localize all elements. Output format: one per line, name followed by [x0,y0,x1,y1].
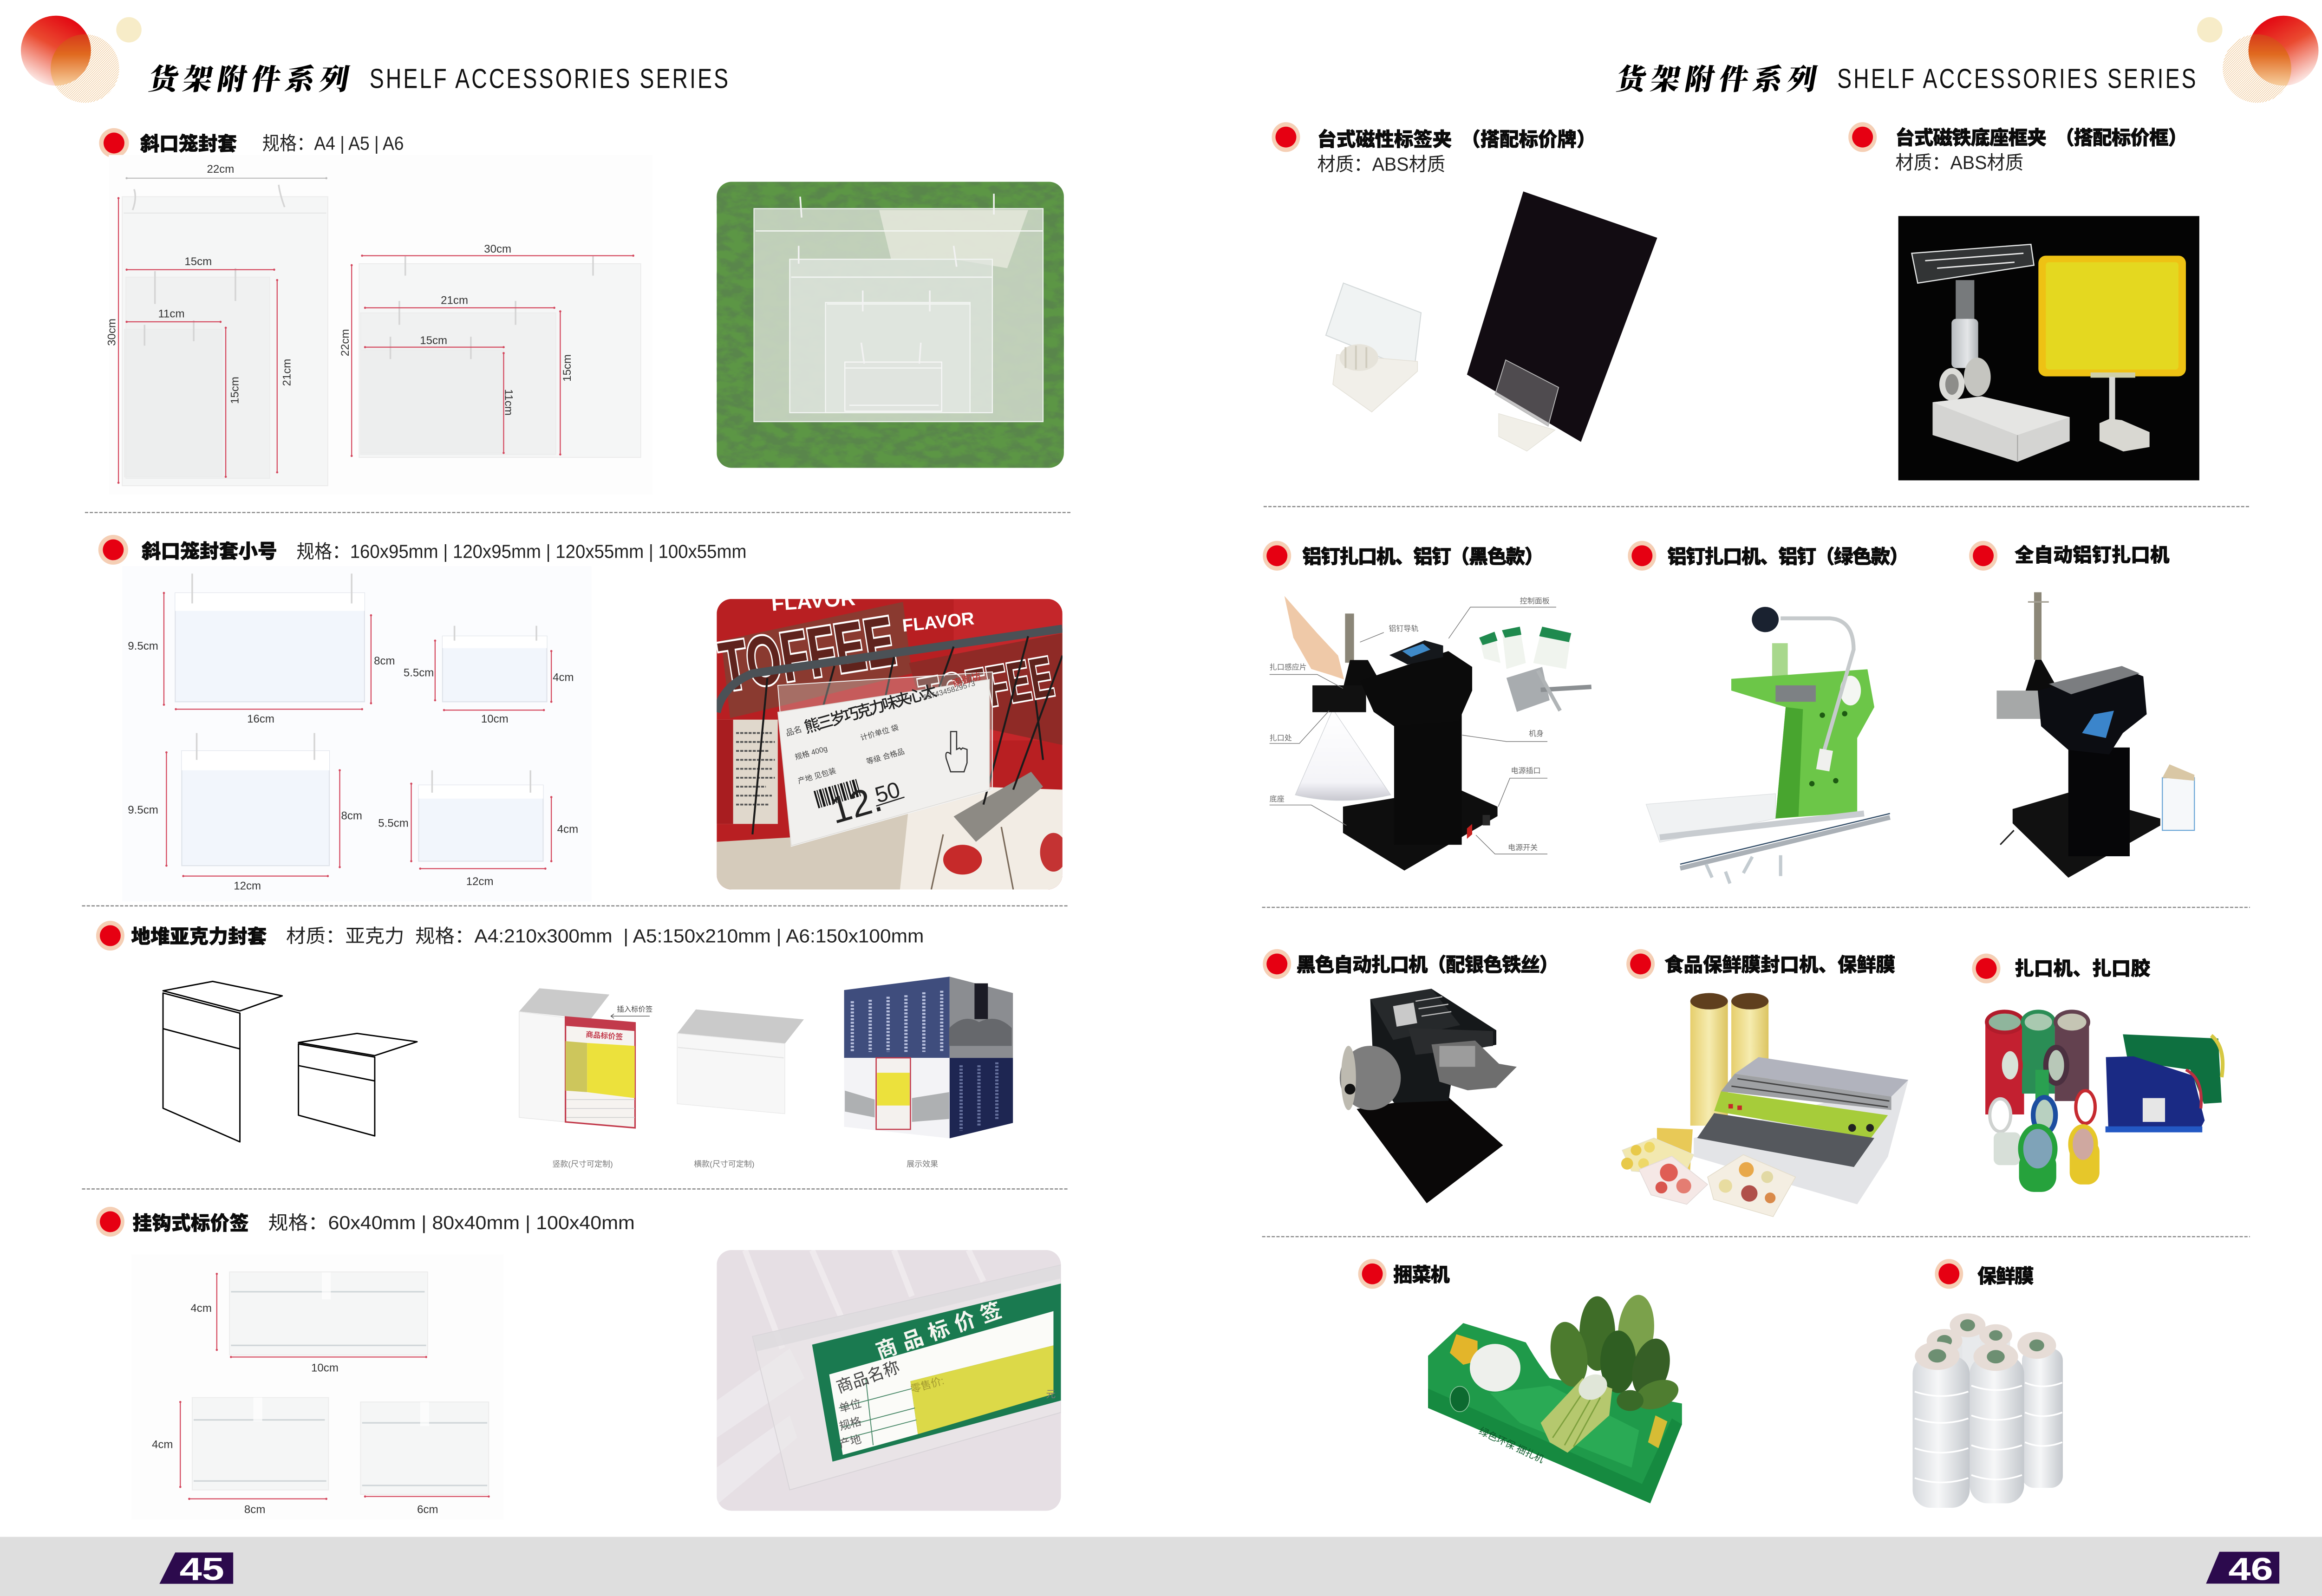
title: left page [146,56,730,98]
panel: A-size bag dimension diagram: 15cm [420,334,447,347]
section headings: sealing machines [1263,949,2150,984]
panel: A-size bag dimension diagram: 21cm [281,359,294,386]
photo: hook tag with green price label: 商品标价签 [873,1298,1004,1363]
panel: A-size bag dimension diagram: 11cm [158,307,184,320]
photo: price label on toffee basket: 规格 400g [794,744,828,762]
photo: hook tag with green price label: 商品名称 [834,1358,902,1397]
page number tag: 45 [159,1551,233,1587]
header logo: right circles [2197,16,2318,103]
captions for sleeve products: 横款(尺寸可定制) [694,1160,755,1168]
photo: price label on toffee basket: 12. [825,777,887,832]
photo: hook tag with green price label: 规格 [838,1415,863,1433]
section heading: 挂钩式标价签: 挂钩式标价签 [133,1212,249,1234]
section headings: riveting machines: 全自动铝钉扎口机 [2015,544,2170,566]
product: black aluminium clip machine with callouts: 电源开关 [1508,843,1538,852]
title: right page: SHELF ACCESSORIES SERIES [1837,63,2198,94]
section heading: 捆菜机: 捆菜机 [1393,1264,1450,1285]
section heading: 斜口笼封套: 规格：A4 | A5 | A6 [262,132,404,154]
photo: price label on toffee basket: TOFFEE [915,645,1058,730]
divider [82,905,1069,906]
photo: hook tag with green price label: 零售价: [909,1375,946,1395]
page number tag: 46: 46 [2228,1551,2273,1587]
page number tag: 46 [2206,1551,2279,1587]
photo: price label on toffee basket: 6974345829573 [922,679,976,702]
photo: price label on toffee basket: TOFFEE [714,601,900,706]
product: vertical acrylic sleeve with poster: 插入标价签 [617,1005,652,1014]
panel: small bag dimension diagram [122,566,592,901]
section heading: 捆菜机 [1358,1259,1450,1289]
product: black sign board with clip [1467,191,1657,451]
product: horizontal acrylic sleeve [677,1010,804,1114]
section heading: 地堆亚克力封套: 材质：亚克力 规格：A4:210x300mm | A5:150x210mm | A6:150x100mm [286,925,924,946]
photo: magnetic base frame clip on black [1898,216,2199,480]
panel: A-size bag dimension diagram: 30cm [484,243,511,255]
line drawing: tall acrylic sleeve [163,981,282,1142]
captions for sleeve products: 展示效果 [907,1160,938,1168]
panel: hook tag dimension diagram: 4cm [190,1302,212,1315]
captions for sleeve products: 竖款(尺寸可定制) [552,1160,613,1168]
section heading: 斜口笼封套: 斜口笼封套 [140,133,237,155]
divider [1262,907,2250,908]
panel: A-size bag dimension diagram: 11cm [502,389,515,416]
product: black aluminium clip machine with callouts: 控制面板 [1520,597,1550,605]
divider [1262,1236,2250,1237]
product: green aluminium clip machine [1646,607,1890,884]
product: black aluminium clip machine with callouts: 扎口处 [1270,734,1292,743]
photo: hook tag with green price label: 单位 [838,1397,863,1415]
photo: price label on toffee basket [714,586,1067,890]
captions for sleeve products [552,1160,938,1168]
section heading: 台式磁性标签夹: 材质：ABS材质 [1317,153,1445,175]
photo: price label on toffee basket: 品名 [785,724,803,738]
title: right page [1614,56,2198,98]
header logo: left circles [21,16,142,103]
section headings: riveting machines: 铝钉扎口机、铝钉（绿色款） [1667,546,1909,567]
section headings: sealing machines: 食品保鲜膜封口机、保鲜膜 [1664,954,1895,976]
section heading: 挂钩式标价签 [96,1207,635,1237]
panel: small bag dimension diagram: 9.5cm [128,640,158,652]
product: automatic aluminium clip machine [1996,592,2194,878]
section heading: 保鲜膜: 保鲜膜 [1977,1265,2034,1287]
section heading: 台式磁性标签夹: 台式磁性标签夹 （搭配标价牌） [1317,128,1596,150]
panel: small bag dimension diagram: 10cm [481,713,509,725]
product: black aluminium clip machine with callouts: 底座 [1270,795,1285,803]
panel: small bag dimension diagram: 16cm [247,713,274,725]
title: left page: SHELF ACCESSORIES SERIES [370,63,730,94]
product: vertical acrylic sleeve with poster: 商品标价签 [586,1030,623,1042]
divider [82,1188,1069,1189]
title: right page: 货架附件系列 [1614,56,1821,98]
panel: small bag dimension diagram: 8cm [341,810,362,822]
photo: price label on toffee basket: 50 [872,777,903,808]
panel: A-size bag dimension diagram: 21cm [441,294,468,307]
section heading: 斜口笼封套小号 [98,535,746,565]
panel: hook tag dimension diagram: 10cm [311,1361,339,1374]
photo: price label on toffee basket: 计价单位 袋 [860,723,900,742]
section headings: sealing machines: 黑色自动扎口机（配银色铁丝） [1296,954,1559,976]
section heading: 台式磁性标签夹 [1272,122,1596,175]
product: black aluminium clip machine with callouts: 电源插口 [1511,767,1541,775]
divider [1264,506,2250,507]
panel: small bag dimension diagram: 12cm [234,880,261,892]
section heading: 台式磁铁底座框夹: 材质：ABS材质 [1895,152,2023,173]
panel: small bag dimension diagram: 5.5cm [378,817,409,830]
panel: hook tag dimension diagram: 4cm [152,1439,173,1451]
section headings: riveting machines [1263,541,2170,571]
photo: bags on grass [717,182,1064,468]
panel: small bag dimension diagram: 5.5cm [404,667,434,679]
panel: hook tag dimension diagram: 6cm [417,1503,438,1516]
section heading: 地堆亚克力封套: 地堆亚克力封套 [131,925,267,947]
product: vegetable bundling machine [1428,1293,1683,1503]
section heading: 保鲜膜 [1935,1259,2034,1289]
section heading: 挂钩式标价签: 规格：60x40mm | 80x40mm | 100x40mm [268,1212,635,1233]
product: stretch film roll stack [1912,1313,2063,1508]
panel: A-size bag dimension diagram: 22cm [207,163,234,176]
panel: small bag dimension diagram: 8cm [374,655,395,667]
panel: A-size bag dimension diagram [106,155,652,495]
product: black automatic bag tying machine [1340,989,1517,1203]
section headings: sealing machines: 扎口机、扎口胶 [2015,958,2150,979]
panel: small bag dimension diagram: 4cm [553,671,574,684]
product: vertical acrylic sleeve with poster [519,988,652,1128]
panel: A-size bag dimension diagram: 22cm [339,329,352,356]
product: black aluminium clip machine with callouts: 扎口感应片 [1270,663,1307,671]
section headings: riveting machines: 铝钉扎口机、铝钉（黑色款） [1302,546,1544,567]
photo: hook tag with green price label: 产地 [838,1433,863,1451]
photo: price label on toffee basket: FLAVOR [770,586,856,615]
panel: A-size bag dimension diagram: 15cm [228,377,241,404]
panel: small bag dimension diagram: 4cm [557,823,578,836]
product: vegetable bundling machine: 绿色环保 捆扎机 [1477,1426,1546,1465]
panel: A-size bag dimension diagram: 15cm [184,255,212,268]
divider [85,512,1071,513]
line drawing: short acrylic sleeve [299,1033,417,1136]
photo: price label on toffee basket: FLAVOR [901,608,975,636]
panel: hook tag dimension diagram [131,1255,503,1520]
footer band [0,1537,2322,1596]
photo: hook tag with green price label [717,1250,1061,1511]
product: white magnetic clip [1326,283,1421,412]
product: black aluminium clip machine with callouts: 铝钉导轨 [1389,625,1419,633]
section heading: 台式磁铁底座框夹 [1848,122,2187,173]
photo: price label on toffee basket: 等级 合格品 [866,747,906,766]
section heading: 斜口笼封套小号: 斜口笼封套小号 [142,541,277,562]
product: display effect box stack [844,977,1013,1138]
section heading: 斜口笼封套 [99,128,404,158]
product: black aluminium clip machine with callouts [1270,596,1591,871]
section heading: 台式磁铁底座框夹: 台式磁铁底座框夹 （搭配标价框） [1895,127,2187,149]
title: left page: 货架附件系列 [146,56,353,98]
panel: small bag dimension diagram: 12cm [466,875,494,888]
product: black aluminium clip machine with callouts: 机身 [1529,730,1544,738]
photo: price label on toffee basket: 产地 见包装 [797,767,837,786]
section heading: 斜口笼封套小号: 规格：160x95mm | 120x95mm | 120x55mm | 100x55mm [297,541,746,562]
photo: price label on toffee basket: 熊三岁巧克力味夹心太 [802,682,939,736]
product: bag sealer dispensers and tape rolls [1985,1012,2223,1192]
section heading: 地堆亚克力封套 [96,921,924,951]
product: food film wrapping machine [1621,993,1908,1217]
page number tag: 45: 45 [180,1551,224,1587]
photo: hook tag with green price label: 元 [1046,1389,1056,1400]
panel: hook tag dimension diagram: 8cm [244,1503,265,1516]
panel: small bag dimension diagram: 9.5cm [128,804,158,816]
panel: A-size bag dimension diagram: 30cm [106,319,118,346]
panel: A-size bag dimension diagram: 15cm [561,354,574,382]
photo: price label on toffee basket: 南御坊 [952,671,982,689]
